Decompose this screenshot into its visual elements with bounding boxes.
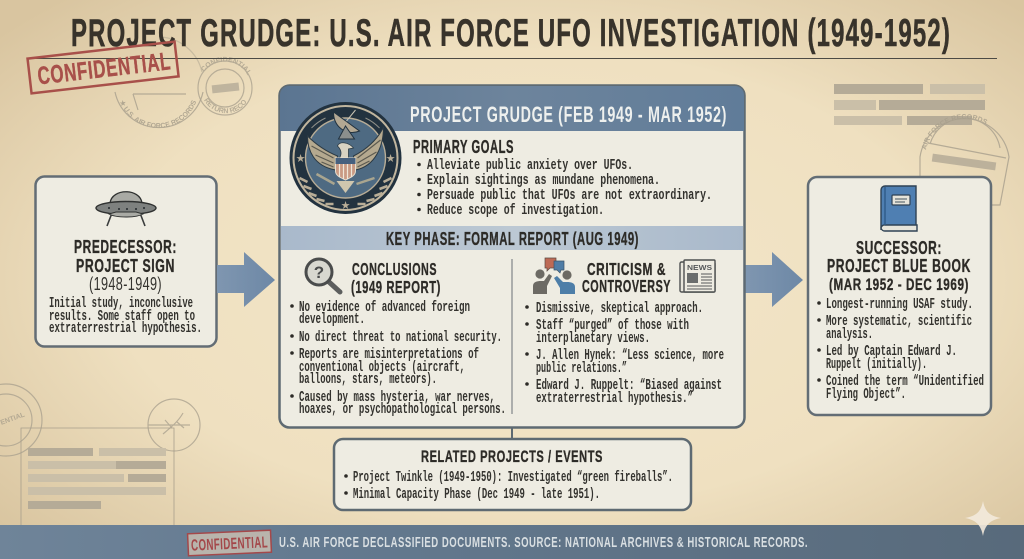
stamp: top right arch: AIR FORCE RECORDS xyxy=(922,114,988,150)
text block: primary goals: Reduce scope of investigation. xyxy=(427,203,604,219)
stamp: bottom left round: ENTIAL xyxy=(0,411,27,427)
wings xyxy=(308,136,338,170)
heading: successor xyxy=(827,238,971,294)
icon: flying saucer xyxy=(96,192,156,226)
text block: criticism list: Edward J. Ruppelt: “Biased against xyxy=(536,378,722,394)
heading: predecessor: PROJECT SIGN xyxy=(76,256,175,276)
laurels xyxy=(316,174,374,184)
text block: conclusions list: conventional objects (aircraft, xyxy=(299,360,465,376)
heading: successor: SUCCESSOR: xyxy=(856,238,942,258)
text block: successor list xyxy=(817,297,984,403)
icon: magnifying glass xyxy=(306,259,340,292)
text block: primary goals: Persuade public that UFOs are not extraordinary. xyxy=(427,188,712,204)
text block: criticism list: extraterrestrial hypothesis.” xyxy=(536,391,693,407)
heading: criticism and controversy: CONTROVERSY xyxy=(582,276,671,296)
stamp: U.S. Air Force Records xyxy=(114,36,204,128)
arrow: grudge to successor xyxy=(745,252,803,307)
text block: primary goals: Alleviate public anxiety over UFOs. xyxy=(427,158,633,174)
heading: predecessor: PREDECESSOR: xyxy=(74,237,177,257)
heading: panel title: PROJECT GRUDGE (FEB 1949 - MAR 1952) xyxy=(410,102,727,127)
stamp: confidential round xyxy=(197,56,253,116)
text block: criticism list: Dismissive, skeptical approach. xyxy=(536,301,703,317)
text block: predecessor summary: extraterrestrial hypothesis. xyxy=(49,321,202,337)
text block: predecessor summary: results. Some staff open to xyxy=(49,309,195,325)
column divider xyxy=(512,259,513,414)
icon: people debating xyxy=(533,258,575,294)
stamp: bottom left round xyxy=(0,384,42,456)
redacted block: top right xyxy=(834,84,985,125)
stars: ★ xyxy=(296,153,306,165)
key phase band xyxy=(281,226,743,250)
confidential stamp: top left xyxy=(28,42,179,93)
arrow: predecessor to grudge xyxy=(217,252,275,307)
panel: main Project Grudge xyxy=(280,86,744,428)
text block: conclusions list: No direct threat to national security. xyxy=(299,330,502,346)
text block: criticism list: public relations.” xyxy=(536,361,627,377)
stamp: U.S. Air Force Records: ★ U.S. AIR FORCE RECORDS xyxy=(120,100,196,128)
connector: main panel to related projects xyxy=(511,428,513,439)
icon: newspaper: NEWS xyxy=(687,263,712,272)
text block: related list: Project Twinkle (1949-1950): Investigated “green fireballs”. xyxy=(353,470,673,486)
icon: sparkle xyxy=(965,501,1001,536)
stamp: top right arch xyxy=(919,114,1010,206)
text block: conclusions list: No evidence of advanced foreign xyxy=(299,300,470,316)
confidential stamp: footer xyxy=(188,530,271,556)
text block: conclusions list: Caused by mass hysteria, war nerves, xyxy=(299,390,495,406)
text block: criticism list xyxy=(525,301,724,407)
text block: successor list: Flying Object”. xyxy=(826,387,906,403)
dish xyxy=(334,112,360,132)
head xyxy=(338,143,354,158)
text block: successor list: analysis. xyxy=(826,327,873,343)
confidential stamp: footer: CONFIDENTIAL xyxy=(191,534,268,555)
icon: air force eagle seal: ★ xyxy=(341,200,351,212)
text block: conclusions list: development. xyxy=(299,312,365,328)
heading: criticism and controversy: CRITICISM & xyxy=(587,259,666,279)
stamp: bottom centre-left round xyxy=(148,399,200,451)
text block: conclusions list: hoaxes, or psychopathological persons. xyxy=(299,402,506,418)
panel: related projects and events xyxy=(334,439,691,510)
header band xyxy=(280,86,744,131)
text block: predecessor summary xyxy=(49,296,202,337)
footer bar xyxy=(0,525,1024,559)
text block: criticism list: Staff “purged” of those with xyxy=(536,318,689,334)
heading: predecessor xyxy=(74,237,177,294)
heading: conclusions: CONCLUSIONS xyxy=(352,259,437,279)
icon: air force eagle seal: ★ xyxy=(386,153,396,165)
text block: conclusions list xyxy=(290,300,506,418)
text block: criticism list: J. Allen Hynek: “Less science, more xyxy=(536,348,724,364)
text block: conclusions list: balloons, stars, meteors). xyxy=(299,372,437,388)
heading: criticism and controversy xyxy=(582,259,671,296)
text block: conclusions list: Reports are misinterpretations of xyxy=(299,347,479,363)
text block: primary goals: PRIMARY GOALS xyxy=(413,137,514,157)
heading: predecessor: (1948-1949) xyxy=(89,274,162,294)
heading: conclusions xyxy=(351,259,441,297)
icon: blue book xyxy=(881,186,917,231)
confidential stamp: top left: CONFIDENTIAL xyxy=(36,47,172,90)
text block: related list xyxy=(344,470,673,503)
icon: air force eagle seal xyxy=(290,102,402,214)
icon: magnifying glass: ? xyxy=(314,263,324,282)
text block: related list: Minimal Capacity Phase (Dec 1949 - late 1951). xyxy=(353,487,600,503)
heading: conclusions: (1949 REPORT) xyxy=(351,277,441,297)
text block: predecessor summary: Initial study, inconclusive xyxy=(49,296,193,312)
text block: primary goals: Explain sightings as mundane phenomena. xyxy=(427,173,660,189)
heading: related projects: RELATED PROJECTS / EVENTS xyxy=(421,447,603,466)
text block: criticism list: interplanetary views. xyxy=(536,331,650,347)
shield xyxy=(336,158,356,180)
key phase band: KEY PHASE: FORMAL REPORT (AUG 1949) xyxy=(386,229,639,249)
icon: newspaper xyxy=(680,260,715,292)
panel: successor xyxy=(808,177,991,415)
tail xyxy=(336,181,354,193)
stamp: confidential round: CONFIDENTIAL xyxy=(202,56,250,76)
panel: predecessor xyxy=(36,176,216,346)
redacted document block: bottom left xyxy=(21,428,174,525)
text block: primary goals xyxy=(413,137,712,219)
text block: successor list: Ruppelt (initially). xyxy=(826,357,927,373)
